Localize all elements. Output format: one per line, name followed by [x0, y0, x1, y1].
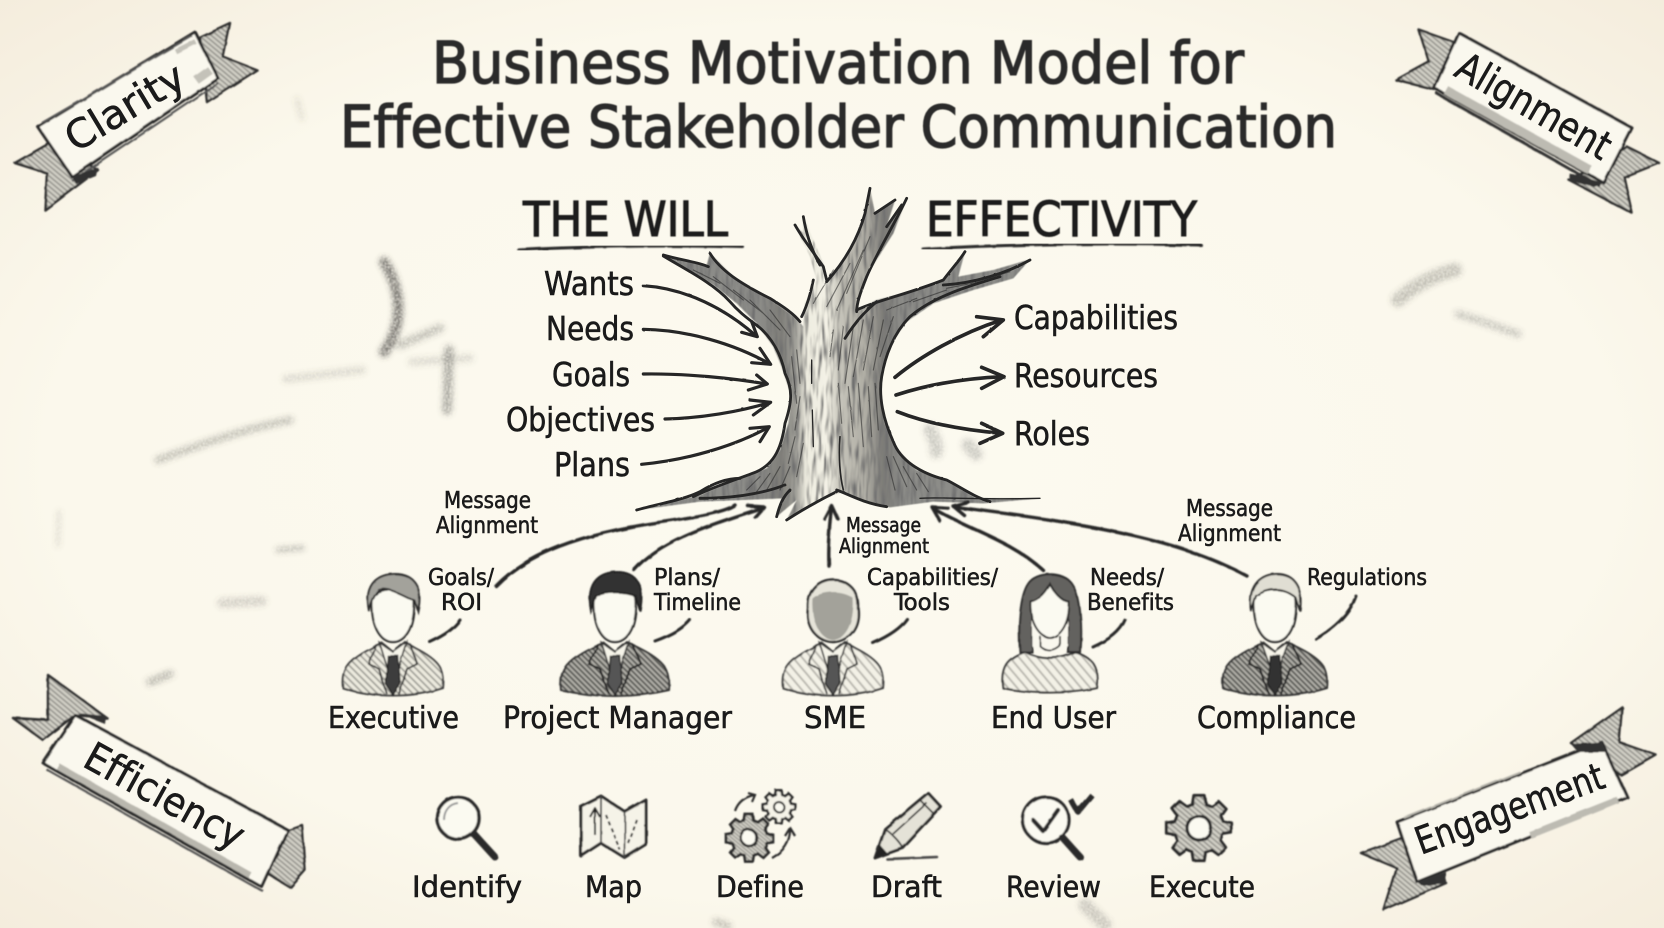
step: Define: Define — [716, 870, 804, 904]
tree: silhouette — [637, 188, 1040, 520]
list: the will items: Goals — [552, 355, 630, 394]
callout: Capabilities/Tools: Capabilities/ — [867, 565, 998, 591]
heading: THE WILL: THE WILL — [522, 192, 728, 248]
icon: folded map — [581, 796, 646, 858]
list: effectivity items: Capabilities — [1014, 298, 1178, 337]
banner: Clarity: Clarity — [57, 54, 194, 162]
label: Compliance: Compliance — [1197, 701, 1356, 736]
labels: message alignment: Message — [846, 513, 921, 537]
arrows: trunk to effectivity — [895, 317, 1004, 443]
list: the will items: Wants — [544, 264, 634, 303]
icon: magnifier with check — [1023, 795, 1092, 857]
callout: Goals/ROI — [428, 565, 494, 642]
list: the will items — [506, 264, 655, 484]
tree: pencil hatching — [693, 237, 1010, 492]
step: Review: Review — [1006, 870, 1101, 904]
list: the will items: Objectives — [506, 400, 655, 439]
step: Draft — [871, 793, 942, 904]
callout: Plans/Timeline: Timeline — [653, 590, 741, 616]
step: Execute: Execute — [1149, 870, 1255, 904]
label: End User: End User — [991, 701, 1117, 736]
banner: Efficiency: Efficiency — [76, 734, 252, 859]
banner: Engagement — [1361, 707, 1656, 910]
icon: pencil — [875, 793, 941, 859]
label: SME: SME — [804, 701, 866, 736]
stakeholder: SME — [783, 580, 883, 736]
callout: Plans/Timeline — [653, 565, 741, 641]
list: the will items: Needs — [546, 309, 634, 348]
list: effectivity items — [1014, 298, 1178, 453]
banner: Engagement: Engagement — [1409, 754, 1610, 863]
callout: Needs/Benefits: Benefits — [1087, 590, 1174, 616]
icon: gears with arrows — [726, 791, 795, 861]
step: Identify: Identify — [412, 870, 522, 904]
callout: Capabilities/Tools — [867, 565, 998, 643]
label: Executive: Executive — [328, 701, 459, 736]
labels: message alignment: Message — [444, 488, 531, 514]
banner: Alignment: Alignment — [1448, 44, 1619, 170]
stakeholder: Executive — [328, 574, 459, 736]
callout: Needs/Benefits — [1087, 565, 1174, 647]
step: Define — [716, 791, 804, 904]
callout: Capabilities/Tools: Tools — [893, 590, 950, 616]
title: Effective Stakeholder Communication — [340, 93, 1337, 161]
tree: ink outlines — [637, 188, 1040, 520]
stakeholder: End User — [991, 574, 1117, 736]
list: effectivity items: Resources — [1014, 356, 1158, 395]
callout: Goals/ROI: Goals/ — [428, 565, 494, 591]
step: Review — [1006, 795, 1101, 904]
labels: message alignment: Alignment — [839, 534, 929, 558]
step: Map — [581, 796, 646, 904]
labels: message alignment: Alignment — [1178, 521, 1281, 547]
stakeholder: Compliance — [1197, 574, 1356, 736]
step: Draft: Draft — [871, 870, 942, 904]
tree illustration — [637, 188, 1040, 520]
list: the will items: Plans — [554, 445, 630, 484]
icon: gear — [1166, 795, 1232, 861]
callout: Needs/Benefits: Needs/ — [1090, 565, 1164, 591]
step: Identify — [412, 797, 522, 904]
banner: Alignment — [1396, 30, 1659, 213]
arrows: stakeholder message alignment — [496, 502, 1247, 586]
callout: Regulations: Regulations — [1307, 565, 1427, 591]
title: Business Motivation Model for — [432, 29, 1245, 97]
callout: Regulations — [1307, 565, 1427, 639]
list: effectivity items: Roles — [1014, 414, 1090, 453]
background smudges — [58, 100, 1518, 926]
labels: message alignment: Message — [1186, 496, 1273, 522]
banner: Clarity — [15, 23, 257, 210]
title — [340, 29, 1337, 161]
callout: Plans/Timeline: Plans/ — [654, 565, 720, 591]
label: Project Manager: Project Manager — [503, 701, 733, 736]
step: Map: Map — [585, 870, 642, 904]
labels: message alignment — [436, 488, 1281, 558]
callout: Goals/ROI: ROI — [441, 590, 482, 616]
banner: Efficiency — [13, 675, 305, 892]
stakeholder: Project Manager — [503, 572, 733, 736]
heading: EFFECTIVITY: EFFECTIVITY — [926, 192, 1198, 248]
icon: magnifying glass — [437, 797, 495, 857]
arrows: will into trunk — [642, 286, 771, 464]
labels: message alignment: Alignment — [436, 513, 538, 539]
step: Execute — [1149, 795, 1255, 904]
